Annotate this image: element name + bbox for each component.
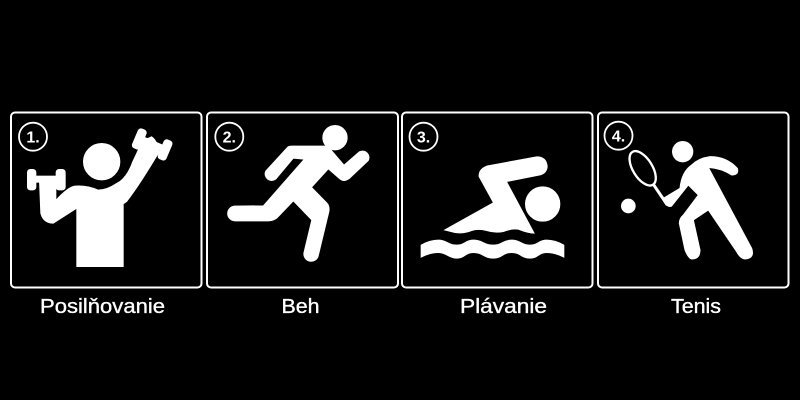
number badge 1: 1. [26, 130, 40, 146]
icon: runner [227, 125, 369, 261]
number badge 4 [604, 122, 632, 150]
label: Posilňovanie: Posilňovanie [40, 296, 165, 318]
card frame 4 [598, 112, 788, 288]
icon: person lifting dumbbells [27, 128, 173, 267]
number badge 2: 2. [223, 130, 236, 146]
icon: tennis player [621, 141, 752, 259]
panel: Beh [207, 112, 398, 318]
icon: swimmer [421, 157, 564, 258]
number badge 3: 3. [417, 130, 430, 146]
panel: Plávanie [402, 112, 592, 318]
card frame 3 [402, 112, 592, 288]
label: Beh: Beh [282, 296, 320, 318]
panel: Posilňovanie [11, 112, 202, 318]
number badge 2 [215, 123, 243, 151]
number badge 3 [410, 123, 438, 151]
card frame 2 [207, 112, 398, 288]
card frame 1 [11, 112, 202, 288]
panel: Tenis [598, 112, 788, 318]
number badge 1 [19, 123, 47, 151]
label: Plávanie: Plávanie [460, 296, 547, 318]
label: Tenis: Tenis [671, 296, 721, 318]
number badge 4: 4. [612, 128, 625, 146]
